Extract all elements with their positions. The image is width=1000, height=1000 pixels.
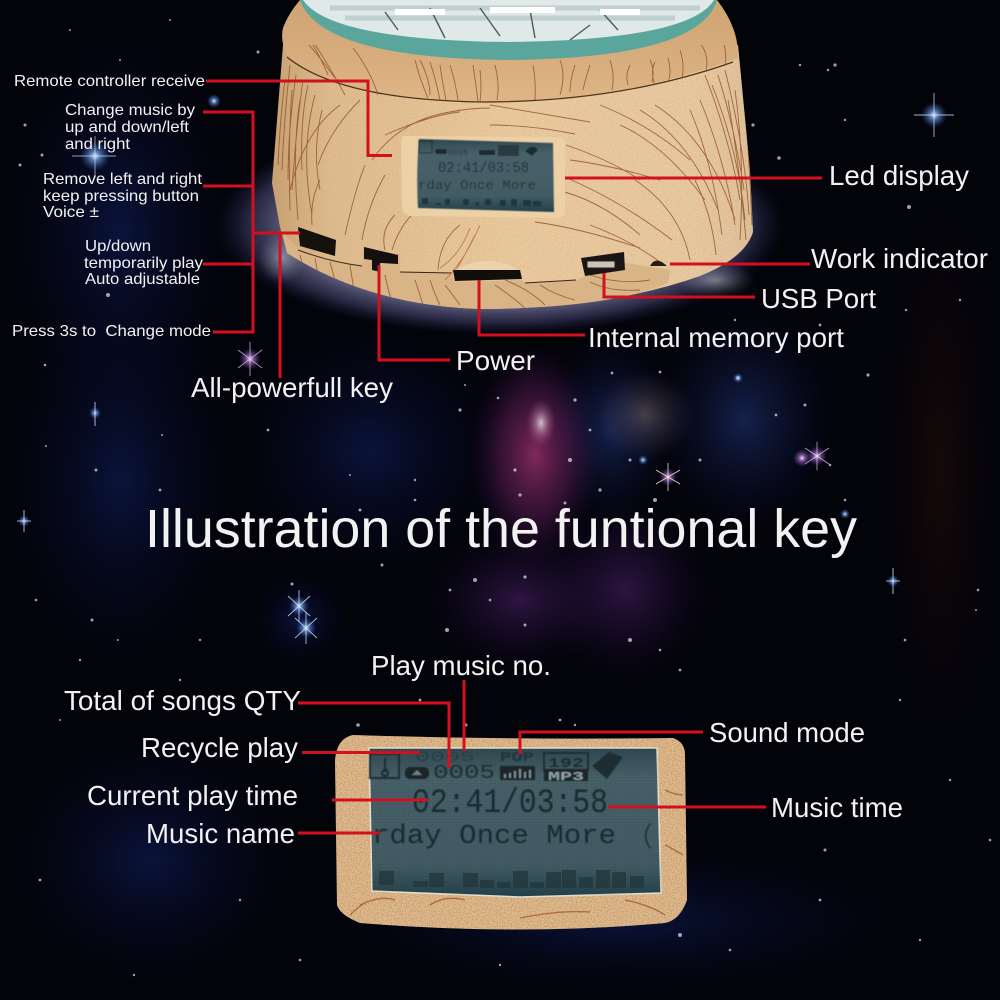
- wood bezel: [335, 735, 687, 930]
- work indicator hole: [650, 261, 667, 266]
- status row icons: [370, 750, 623, 784]
- small LCD equaliser: [422, 198, 541, 206]
- small LCD time: 02:41/03:58: [438, 160, 529, 177]
- song name overflow bracket: (: [640, 822, 656, 852]
- small LCD screen: [417, 139, 554, 212]
- label: remove left and right: Voice ±: [43, 204, 99, 221]
- label: USB port: USB Port: [761, 283, 876, 314]
- label: up/down: Up/down: [85, 238, 151, 255]
- label: up/down: temporarily play: [84, 255, 203, 272]
- song name: rday Once More: [372, 822, 616, 852]
- label: up/down: [84, 238, 203, 288]
- label: remote controller receive: Remote controller receive: [14, 73, 205, 90]
- label: remove left and right: Remove left and right: [43, 171, 203, 188]
- label: remove left and right: [43, 171, 203, 221]
- label: work indicator: Work indicator: [811, 243, 988, 274]
- label: recycle play: Recycle play: [141, 732, 298, 763]
- power switch: [364, 247, 398, 272]
- LCD recess: [401, 136, 565, 218]
- label: music time: Music time: [771, 792, 903, 823]
- glow under base: [215, 115, 785, 335]
- label: power: Power: [456, 345, 535, 376]
- label: play music no: Play music no.: [371, 650, 551, 681]
- base band: [283, 232, 670, 309]
- label: remove left and right: keep pressing button: [43, 188, 199, 205]
- label: up/down: Auto adjustable: [85, 271, 200, 288]
- label: current play time: Current play time: [87, 780, 298, 811]
- status row icons: 0005: [433, 762, 495, 784]
- glass top dish: [300, 0, 717, 60]
- product: wooden base with LCD: [272, 0, 753, 309]
- status row icons: 192: [548, 756, 584, 772]
- label: change music: Change music by: [65, 102, 195, 119]
- label: change music: up and down/left: [65, 119, 190, 136]
- status row icons: POP: [500, 750, 534, 766]
- label: total of songs: Total of songs QTY: [64, 685, 301, 716]
- label: all-powerful key: All-powerfull key: [191, 372, 393, 403]
- small LCD status row: 0005: [448, 149, 468, 158]
- label: internal memory port: Internal memory port: [588, 322, 844, 353]
- label: change music: [65, 102, 195, 153]
- status row icons: 0005: [415, 750, 475, 766]
- screen: [369, 748, 661, 897]
- title: Illustration of the funtional key: [145, 499, 857, 559]
- time readout: 02:41/03:58: [412, 785, 608, 823]
- label: press 3s: Press 3s to Change mode: [12, 323, 211, 340]
- upper rim: [282, 0, 738, 102]
- equaliser bars: [379, 870, 644, 888]
- labels: side keys: [12, 73, 211, 340]
- small LCD song name: rday Once More: [418, 178, 536, 193]
- memory card slot: [453, 270, 522, 281]
- label: sound mode: Sound mode: [709, 717, 865, 748]
- red callout lines: LCD: [298, 680, 766, 833]
- label: led display: Led display: [829, 160, 969, 191]
- status row icons: MP3: [548, 770, 584, 784]
- enlarged LCD panel: [335, 735, 687, 930]
- wood body: [272, 45, 753, 309]
- side key slot: [298, 227, 336, 256]
- label: change music: and right: [65, 136, 131, 153]
- wood grain: [278, 30, 752, 308]
- label: music name: Music name: [146, 818, 295, 849]
- red callout lines: product: [203, 81, 822, 378]
- USB port: [581, 252, 625, 276]
